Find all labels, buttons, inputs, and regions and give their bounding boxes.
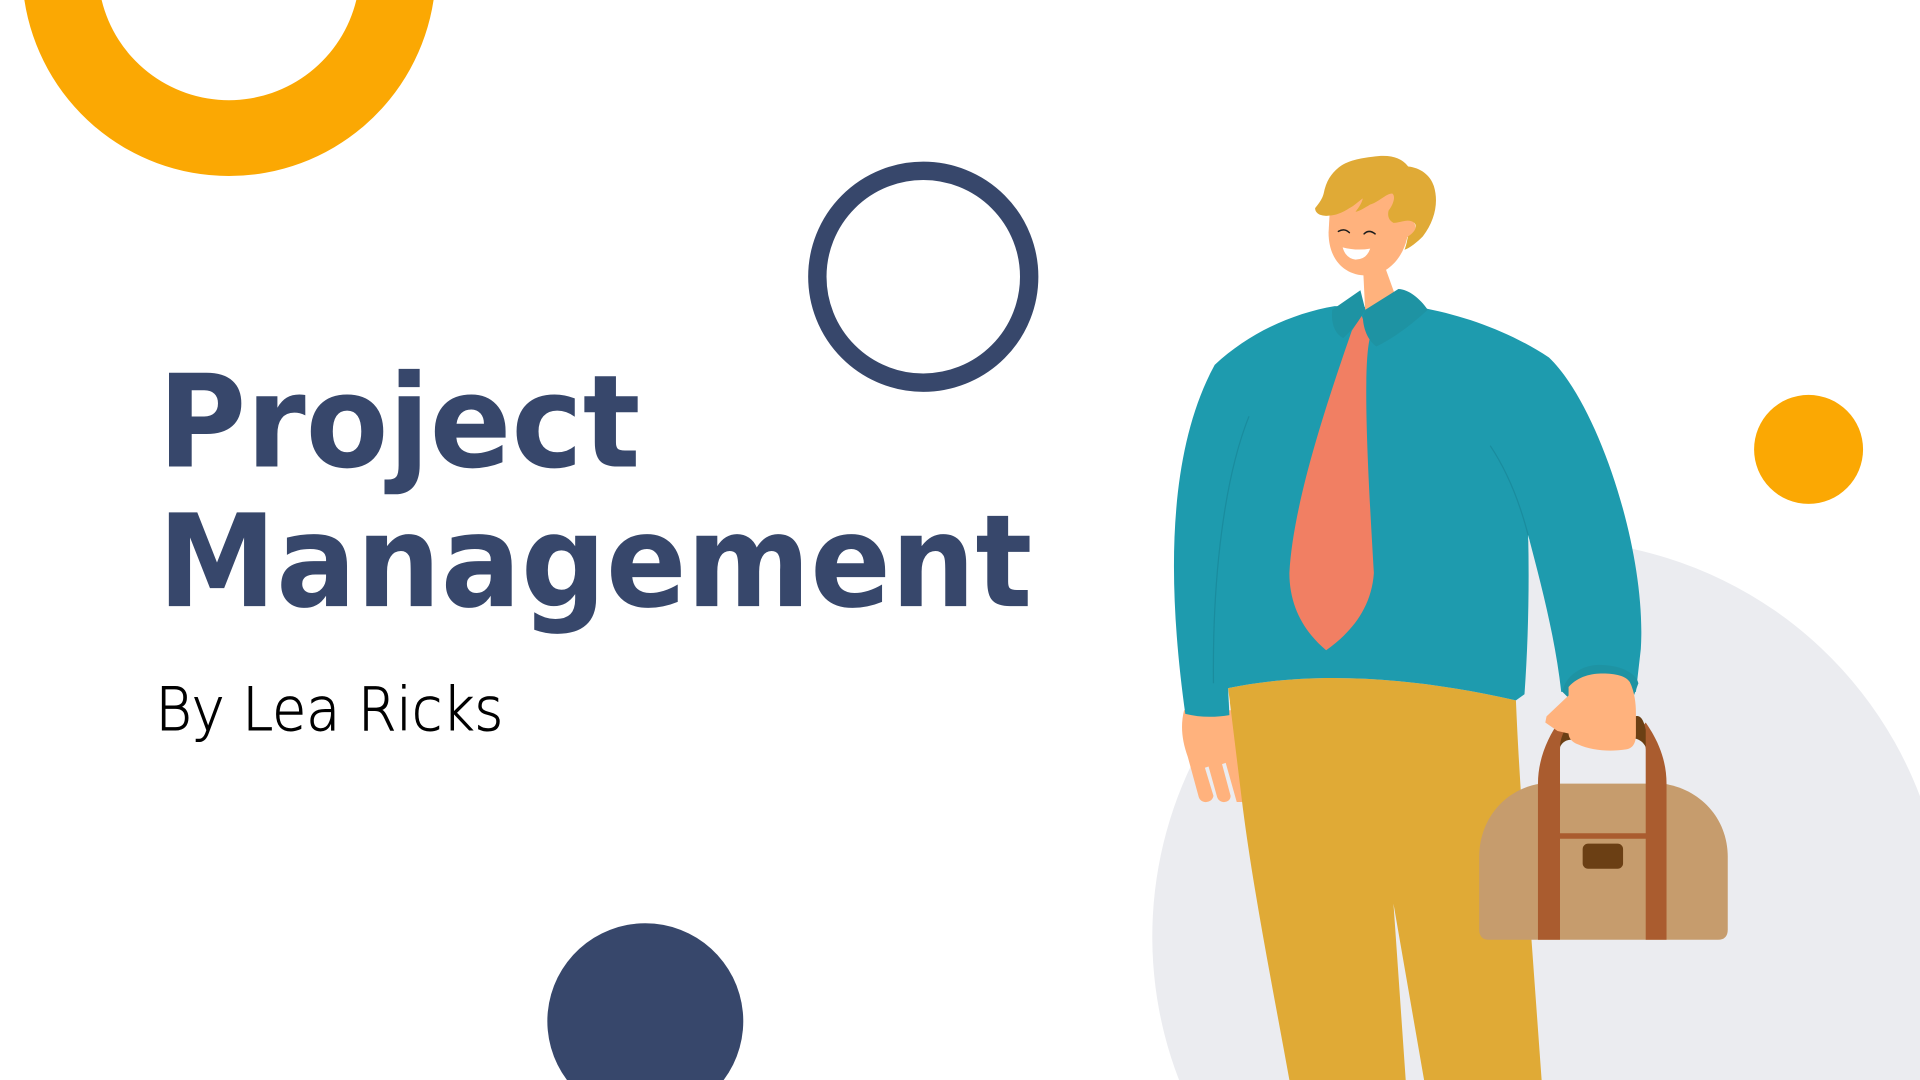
subtitle: author: By Lea Ricks — [156, 675, 503, 745]
shirt — [1174, 306, 1641, 717]
head — [1329, 184, 1411, 276]
hair — [1315, 156, 1436, 250]
shirt collar — [1332, 289, 1428, 347]
bag body — [1479, 784, 1728, 940]
pale grey background circle — [1152, 540, 1920, 1080]
right shirt cuff — [1562, 665, 1638, 697]
left hand — [1182, 710, 1261, 802]
trousers — [1228, 678, 1542, 1080]
title — [158, 349, 1032, 637]
bag straps — [1538, 720, 1667, 940]
bag handles, dark — [1560, 716, 1646, 747]
right hand — [1545, 673, 1636, 751]
tie — [1289, 316, 1374, 650]
title: Project — [158, 349, 640, 498]
ear — [1396, 218, 1416, 238]
shirt creases — [1213, 416, 1528, 683]
decorative navy dot — [547, 923, 743, 1080]
illustration: businessman with bag — [1174, 156, 1728, 1080]
decorative orange ring — [24, 0, 434, 176]
bag tag — [1583, 844, 1623, 869]
title: Management — [158, 488, 1032, 637]
decorative orange dot — [1754, 395, 1863, 504]
smiling eyes — [1338, 230, 1375, 234]
neck — [1363, 263, 1395, 313]
mouth — [1343, 247, 1370, 260]
travel bag — [1479, 716, 1728, 940]
decorative navy ring — [817, 171, 1029, 383]
